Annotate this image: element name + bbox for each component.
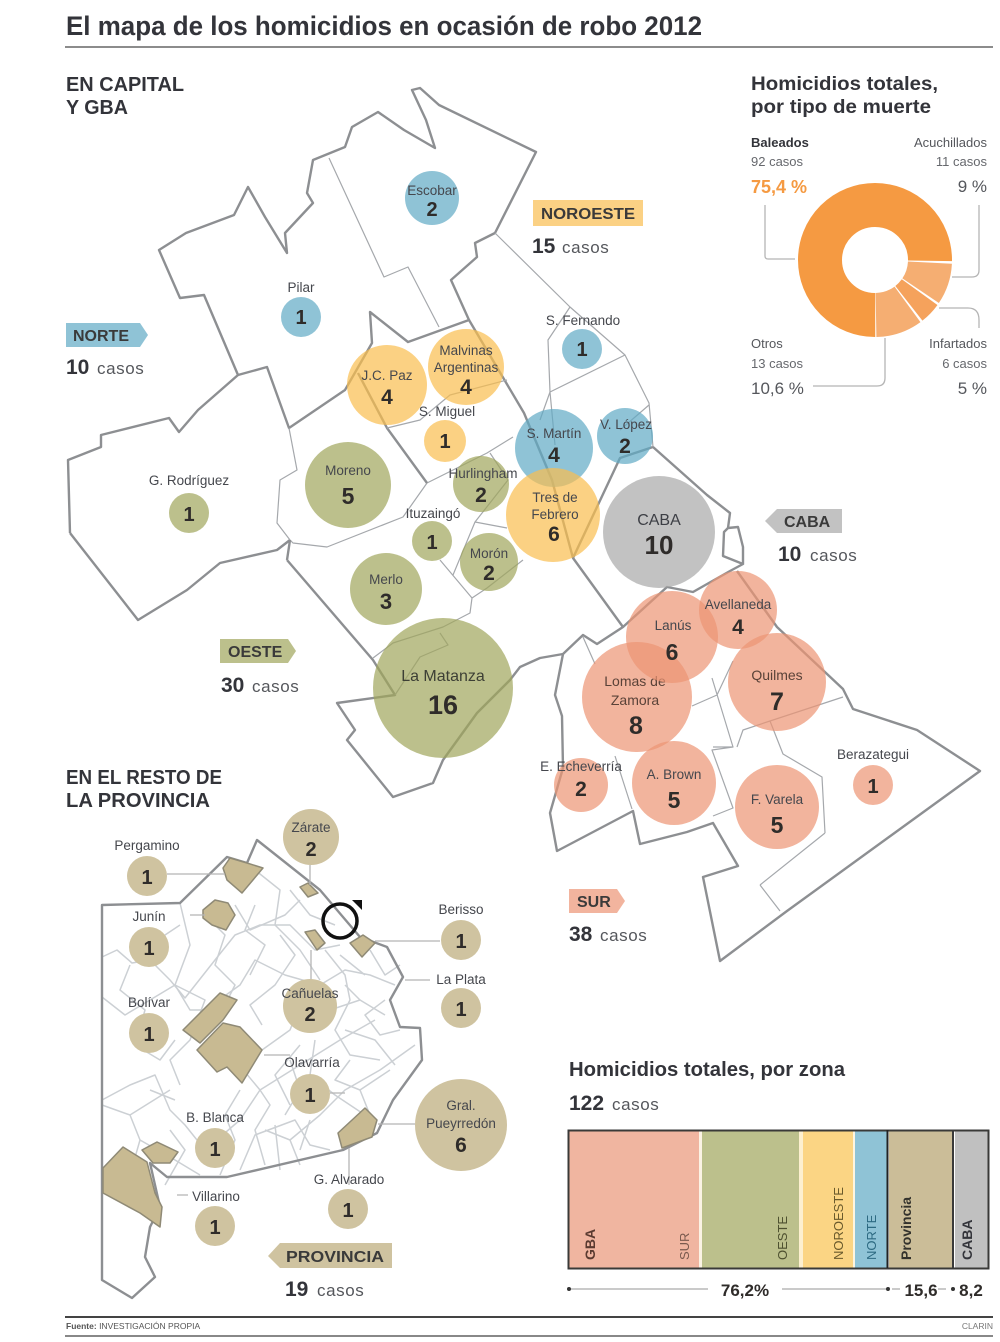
bubble: G. Rodríguez — [149, 473, 229, 533]
bubble: Bolívar: 1 — [143, 1024, 155, 1046]
bubble: V. López: V. López — [600, 417, 652, 432]
bubble: S. Martín: S. Martín — [527, 426, 581, 441]
bubble: Morón: Morón — [470, 546, 508, 561]
label: Infartados: 5 % — [958, 379, 987, 398]
bubble: Pilar — [281, 280, 321, 337]
zone tag: Sur: casos — [600, 926, 647, 945]
zone tag: Provincia: PROVINCIA — [286, 1249, 384, 1266]
bubble: Malvinas Argentinas: 4 — [460, 376, 472, 399]
leader lines — [167, 865, 440, 1195]
bubble: G. Alvarado — [314, 1172, 384, 1229]
bubble: G. Rodríguez: G. Rodríguez — [149, 473, 229, 488]
bubble: Hurlingham — [448, 456, 518, 512]
bubble: F. Varela: F. Varela — [751, 792, 804, 807]
total cases — [569, 1092, 659, 1115]
highlighted counties — [103, 858, 377, 1227]
donut chart — [798, 183, 952, 337]
locator ring — [323, 900, 362, 938]
bubble: J.C. Paz: J.C. Paz — [361, 368, 413, 383]
panel: tipo de muerte — [751, 74, 987, 398]
bubbles: Norte — [281, 171, 653, 487]
bubble: Moreno — [305, 442, 391, 528]
bubble: Berisso: Berisso — [438, 902, 484, 917]
bubble: B. Blanca: 1 — [209, 1139, 221, 1161]
label: Acuchillados: 9 % — [958, 177, 987, 196]
bubble: Ituzaingó: Ituzaingó — [406, 506, 460, 521]
bubble: Cañuelas — [281, 979, 339, 1033]
zone tag: Sur: 38 — [569, 923, 593, 946]
percentage scale: 15,6 — [904, 1281, 938, 1300]
heading: tipo de muerte — [751, 74, 938, 118]
bubble: Olavarría — [284, 1055, 340, 1114]
label: Otros: Otros — [751, 336, 783, 351]
label: Otros — [751, 336, 804, 398]
map: provincia — [102, 809, 507, 1298]
bubble: Pergamino: 1 — [141, 867, 153, 889]
bubble: La Matanza: La Matanza — [401, 668, 485, 685]
bubble: La Plata — [436, 972, 486, 1028]
bubble: CABA: 10 — [645, 530, 673, 560]
label: Otros: 10,6 % — [751, 379, 804, 398]
heading: resto de la provincia — [66, 767, 222, 812]
bubble: Avellaneda: Avellaneda — [705, 597, 772, 612]
zone tag: Sur: SUR — [577, 894, 611, 911]
bubble: B. Blanca: B. Blanca — [186, 1110, 244, 1125]
bubble: Quilmes: Quilmes — [751, 667, 803, 683]
bubble: Merlo: 3 — [380, 589, 392, 614]
zone tag: Norte — [66, 323, 148, 379]
bubble: Quilmes — [728, 633, 826, 731]
bubble: Tres de Febrero: Tres de — [532, 490, 578, 505]
leader lines — [765, 205, 979, 386]
bubble: Bolívar — [128, 995, 171, 1053]
bubble: Tres de Febrero: Febrero — [531, 507, 579, 522]
label: Baleados: Baleados — [751, 135, 809, 150]
bubble: Villarino — [192, 1189, 240, 1246]
zone tag: Oeste: casos — [252, 677, 299, 696]
total cases: casos — [612, 1095, 659, 1114]
zone tag: Norte: NORTE — [73, 328, 129, 345]
bubble: Morón: 2 — [483, 562, 495, 585]
bubble: S. Miguel — [419, 404, 475, 462]
bubble: Pergamino — [114, 838, 180, 896]
label: Baleados: 75,4 % — [751, 177, 807, 197]
heading: Capital y GBA: EN CAPITAL — [66, 74, 184, 96]
label: Infartados: Infartados — [929, 336, 987, 351]
bubble: Pilar: 1 — [295, 307, 307, 329]
bubble: Pilar: Pilar — [287, 280, 315, 295]
heading: resto de la provincia: LA PROVINCIA — [66, 790, 210, 812]
bubble: Malvinas Argentinas: Argentinas — [434, 360, 499, 375]
bubble: Moreno: Moreno — [325, 463, 371, 478]
bubble: Malvinas Argentinas: Malvinas — [439, 343, 493, 358]
bubble: S. Fernando: S. Fernando — [546, 313, 620, 328]
bubble: Zárate — [283, 809, 339, 865]
bubble: Escobar — [405, 171, 459, 225]
credit: CLARIN — [962, 1321, 993, 1331]
bubble: B. Blanca — [186, 1110, 244, 1168]
zone tag: Provincia — [268, 1243, 392, 1301]
bubble: Tres de Febrero: 6 — [548, 523, 560, 546]
bubble: Lomas de Zamora: Zamora — [611, 692, 659, 708]
bubble: S. Miguel: S. Miguel — [419, 404, 475, 419]
bubble: Moreno: 5 — [342, 483, 355, 509]
zone tag: Oeste: OESTE — [228, 644, 283, 661]
bubble: Lomas de Zamora — [582, 642, 692, 752]
bubble: Cañuelas: Cañuelas — [281, 986, 339, 1001]
bubble: Avellaneda — [699, 571, 777, 649]
label: Infartados: 6 casos — [942, 356, 987, 371]
zone tag: CABA: casos — [810, 546, 857, 565]
zone tag: Provincia: 19 — [285, 1278, 308, 1301]
bubble: Escobar: Escobar — [407, 183, 457, 198]
bubble: S. Martín: 4 — [548, 444, 560, 467]
label: Acuchillados: Acuchillados — [914, 135, 987, 150]
label: Otros: 13 casos — [751, 356, 804, 371]
bubble: S. Fernando: 1 — [576, 339, 588, 361]
bubbles: Oeste — [149, 442, 518, 758]
heading: Capital y GBA — [66, 74, 184, 119]
zone tag: Noroeste — [532, 200, 643, 258]
bubble: G. Alvarado: G. Alvarado — [314, 1172, 384, 1187]
percentage scale — [567, 1281, 983, 1300]
bubble: Gral. Pueyrredón — [415, 1079, 507, 1171]
bubble: Lomas de Zamora: 8 — [629, 712, 643, 740]
bubble: Malvinas Argentinas — [428, 329, 504, 405]
county lines — [102, 870, 415, 1185]
panel: homicidios por zona — [567, 1059, 988, 1300]
bubble: A. Brown: 5 — [668, 787, 681, 813]
bubble: Gral. Pueyrredón: Pueyrredón — [426, 1116, 496, 1131]
percentage scale: 8,2 — [959, 1281, 983, 1300]
bubble: La Matanza: 16 — [428, 690, 458, 720]
bubble: La Matanza — [373, 618, 513, 758]
bubble: Ituzaingó — [406, 506, 460, 561]
bubble: Olavarría: 1 — [304, 1085, 316, 1107]
bubble: A. Brown: A. Brown — [647, 767, 701, 782]
zone tag: CABA: CABA — [784, 514, 831, 531]
bar label: OESTE: OESTE — [775, 1216, 790, 1260]
bubble: Quilmes: 7 — [770, 688, 784, 716]
bubble: Avellaneda: 4 — [732, 616, 744, 639]
bubble: Escobar: 2 — [426, 199, 438, 221]
title: El mapa de los homicidios en ocasión de robo 2012 — [66, 11, 702, 41]
bubble: Pergamino: Pergamino — [114, 838, 180, 853]
bubbles: Noroeste — [347, 329, 600, 562]
zone tag: Oeste: 30 — [221, 674, 244, 697]
bubble: S. Fernando — [546, 313, 620, 369]
bubble: CABA — [603, 476, 715, 588]
bubble: Gral. Pueyrredón: 6 — [455, 1134, 467, 1157]
bubble: Lanús: 6 — [666, 639, 678, 665]
bubble: Berazategui: 1 — [867, 776, 879, 798]
bubble: Berisso: 1 — [455, 931, 467, 953]
bubble: Lomas de Zamora: Lomas de — [604, 673, 666, 689]
zone tag: Norte: casos — [97, 359, 144, 378]
bubble: Zárate: 2 — [305, 839, 317, 861]
stacked bar — [568, 1130, 988, 1268]
zone tag: CABA: 10 — [778, 543, 801, 566]
bubble: Villarino: Villarino — [192, 1189, 240, 1204]
map: Capital y GBA outlines — [68, 88, 980, 961]
bubble: J.C. Paz: 4 — [381, 386, 393, 409]
total cases: 122 — [569, 1092, 604, 1115]
label: Acuchillados: 11 casos — [936, 154, 987, 169]
zone tag: Noroeste: NOROESTE — [541, 206, 635, 223]
bubble: F. Varela: 5 — [771, 812, 784, 838]
bubble: Junín: Junín — [132, 909, 166, 924]
bubble: La Plata: 1 — [455, 999, 467, 1021]
bar label: SUR: SUR — [677, 1233, 692, 1260]
bubble: Olavarría: Olavarría — [284, 1055, 340, 1070]
percentage scale: 76,2% — [721, 1281, 769, 1300]
heading: por zona: Homicidios totales, por zona — [569, 1059, 846, 1081]
bubble: Lanús: Lanús — [655, 618, 692, 633]
bubble: J.C. Paz — [347, 345, 427, 425]
bubble: Gral. Pueyrredón: Gral. — [446, 1098, 476, 1113]
bubbles: Sur — [540, 571, 909, 849]
bubble: G. Rodríguez: 1 — [183, 504, 195, 526]
bar label: Provincia: Provincia — [898, 1197, 914, 1260]
bar label: GBA: GBA — [582, 1229, 598, 1260]
bubble: Zárate: Zárate — [291, 820, 331, 835]
heading: resto de la provincia: EN EL RESTO DE — [66, 767, 222, 789]
bubble: Junín — [129, 909, 169, 967]
bubble: V. López — [597, 408, 653, 464]
footer rules — [65, 1317, 993, 1336]
zone tag: Norte: 10 — [66, 356, 89, 379]
bubble: Villarino: 1 — [209, 1217, 221, 1239]
label: Infartados — [929, 336, 987, 398]
bubble: Morón — [460, 533, 518, 591]
bubble: E. Echeverría — [540, 758, 622, 812]
bubble: V. López: 2 — [619, 435, 631, 458]
bubble: CABA: CABA — [637, 512, 681, 529]
zone tag: Sur — [569, 889, 647, 946]
bubble: Ituzaingó: 1 — [426, 532, 438, 554]
zone tag: Noroeste: 15 — [532, 235, 556, 258]
bubble: E. Echeverría: 2 — [575, 778, 587, 801]
bubble: La Plata: La Plata — [436, 972, 486, 987]
heading: Capital y GBA: Y GBA — [66, 97, 128, 119]
zone tag: Noroeste: casos — [562, 238, 609, 257]
bubble: G. Alvarado: 1 — [342, 1200, 354, 1222]
bubble: Merlo — [350, 553, 422, 625]
bubble: S. Miguel: 1 — [439, 431, 451, 453]
bubble: Merlo: Merlo — [369, 572, 403, 587]
bubble: S. Martín — [515, 409, 593, 487]
bubble: Berisso — [438, 902, 484, 960]
bubble: Tres de Febrero — [506, 468, 600, 562]
heading: tipo de muerte: por tipo de muerte — [751, 97, 931, 118]
bubble: Berazategui — [837, 747, 909, 805]
bubble: Hurlingham: 2 — [475, 484, 487, 507]
label: Baleados — [751, 135, 809, 197]
bubble: Junín: 1 — [143, 938, 155, 960]
bar label: NOROESTE: NOROESTE — [831, 1187, 846, 1260]
bubble: Bolívar: Bolívar — [128, 995, 171, 1010]
bubble: E. Echeverría: E. Echeverría — [540, 759, 622, 774]
bar label: NORTE: NORTE — [864, 1214, 879, 1260]
zone tag: CABA — [765, 509, 857, 566]
heading: tipo de muerte: Homicidios totales, — [751, 74, 938, 95]
bubble: F. Varela — [735, 765, 819, 849]
source note: Fuente: INVESTIGACIÓN PROPIA — [66, 1321, 200, 1331]
zone tag: Provincia: casos — [317, 1281, 364, 1300]
bar label: CABA: CABA — [959, 1220, 975, 1260]
bubble: Berazategui: Berazategui — [837, 747, 909, 762]
label: Acuchillados — [914, 135, 987, 196]
label: Baleados: 92 casos — [751, 154, 804, 169]
bubble: A. Brown — [632, 741, 716, 825]
bubble: Cañuelas: 2 — [304, 1004, 316, 1026]
bubble: Lanús — [626, 591, 718, 683]
bubble: Hurlingham: Hurlingham — [448, 466, 518, 481]
zone tag: Oeste — [220, 639, 299, 697]
